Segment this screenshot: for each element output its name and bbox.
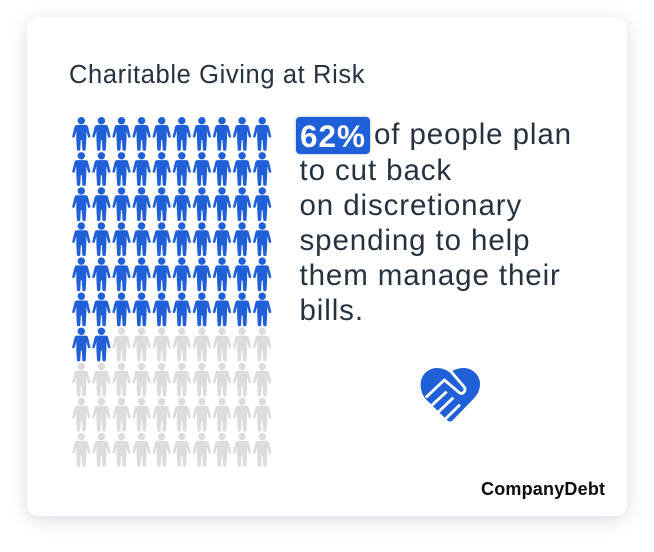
icon: handshake heart (420, 368, 480, 422)
statement text: on discretionary (300, 188, 522, 222)
statement text (300, 118, 572, 326)
blue people (62) (72, 117, 271, 361)
statement text: to cut back (300, 154, 452, 186)
statement text: of people plan (374, 118, 572, 151)
title: Charitable Giving at Risk (69, 61, 365, 89)
statement text: spending to help (300, 224, 530, 256)
logo: CompanyDebt: CompanyDebt (481, 479, 605, 499)
statement text: them manage their (300, 258, 561, 292)
grey people (38) (72, 328, 271, 467)
highlight badge: 62%: 62% (300, 118, 366, 154)
statement text: bills. (300, 294, 364, 326)
